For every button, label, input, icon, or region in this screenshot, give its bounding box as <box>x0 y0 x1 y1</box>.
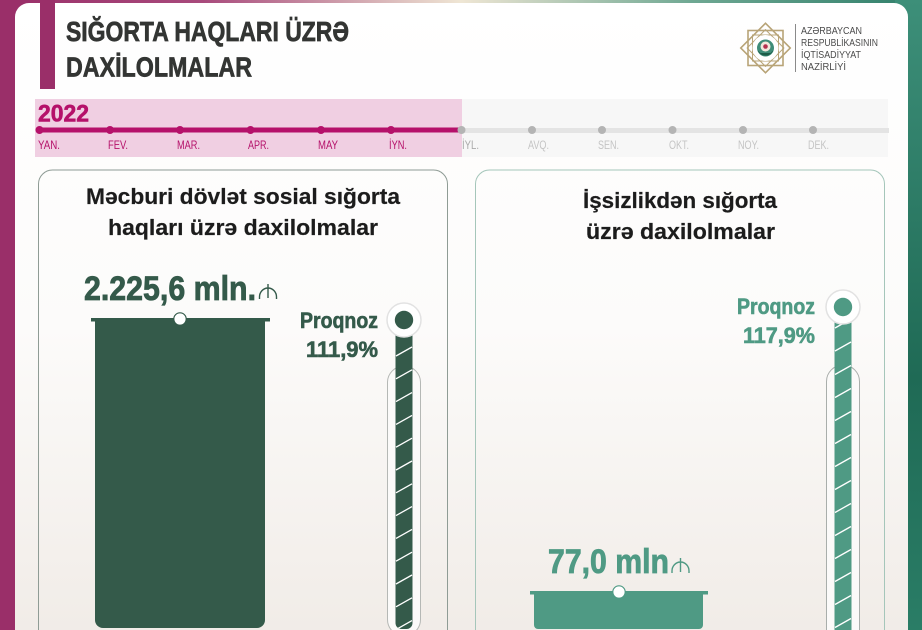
bar <box>91 313 270 628</box>
elapsed months: APR. <box>248 138 269 152</box>
forecast label <box>737 294 815 348</box>
panel: unemployment insurance <box>476 170 884 630</box>
year label: 2022 <box>38 100 89 128</box>
remaining months: OKT. <box>669 138 689 152</box>
elapsed months <box>36 126 407 152</box>
title <box>66 16 349 82</box>
ministry name: NAZİRLİYİ <box>801 60 846 73</box>
value label: 2.225,6 mln. <box>84 270 256 308</box>
panel heading: haqları üzrə daxilolmalar <box>108 215 378 240</box>
panel heading: Məcburi dövlət sosial sığorta <box>86 184 401 209</box>
remaining months: DEK. <box>808 138 829 152</box>
elapsed months: MAY <box>318 138 338 152</box>
panel heading <box>86 184 401 240</box>
panel heading: üzrə daxilolmalar <box>586 219 775 244</box>
forecast label: 117,9% <box>743 323 815 348</box>
forecast label: Proqnoz <box>737 294 815 319</box>
forecast label <box>300 308 378 362</box>
ministry name: RESPUBLİKASININ <box>801 36 878 49</box>
panel: compulsory state social insurance <box>38 170 448 630</box>
remaining months: SEN. <box>598 138 619 152</box>
title: DAXİLOLMALAR <box>66 52 252 82</box>
elapsed months: İYN. <box>389 138 407 152</box>
icon: ministry emblem <box>741 23 790 73</box>
panel heading: İşsizlikdən sığorta <box>583 188 778 213</box>
title: SIĞORTA HAQLARI ÜZRƏ <box>66 16 349 47</box>
forecast gauge <box>826 290 860 630</box>
forecast label: Proqnoz <box>300 308 378 333</box>
title accent bar <box>40 0 55 89</box>
elapsed months: FEV. <box>108 138 128 152</box>
remaining months: NOY. <box>738 138 759 152</box>
elapsed months: YAN. <box>38 138 60 152</box>
panel heading <box>583 188 778 244</box>
ministry name: İQTİSADİYYAT <box>801 48 861 61</box>
icon: manat sign <box>260 284 276 299</box>
elapsed months: MAR. <box>177 138 200 152</box>
forecast label: 111,9% <box>306 337 378 362</box>
forecast gauge <box>387 303 421 630</box>
ministry name <box>801 26 878 73</box>
remaining months: İYL. <box>462 138 479 152</box>
ministry logo <box>741 23 878 73</box>
timeline <box>35 99 889 157</box>
remaining months <box>458 126 829 152</box>
remaining months: AVQ. <box>528 138 549 152</box>
ministry name: AZƏRBAYCAN <box>801 26 862 37</box>
value label: 77,0 mln <box>548 543 669 581</box>
bar <box>530 586 708 629</box>
icon: manat sign <box>672 558 689 573</box>
